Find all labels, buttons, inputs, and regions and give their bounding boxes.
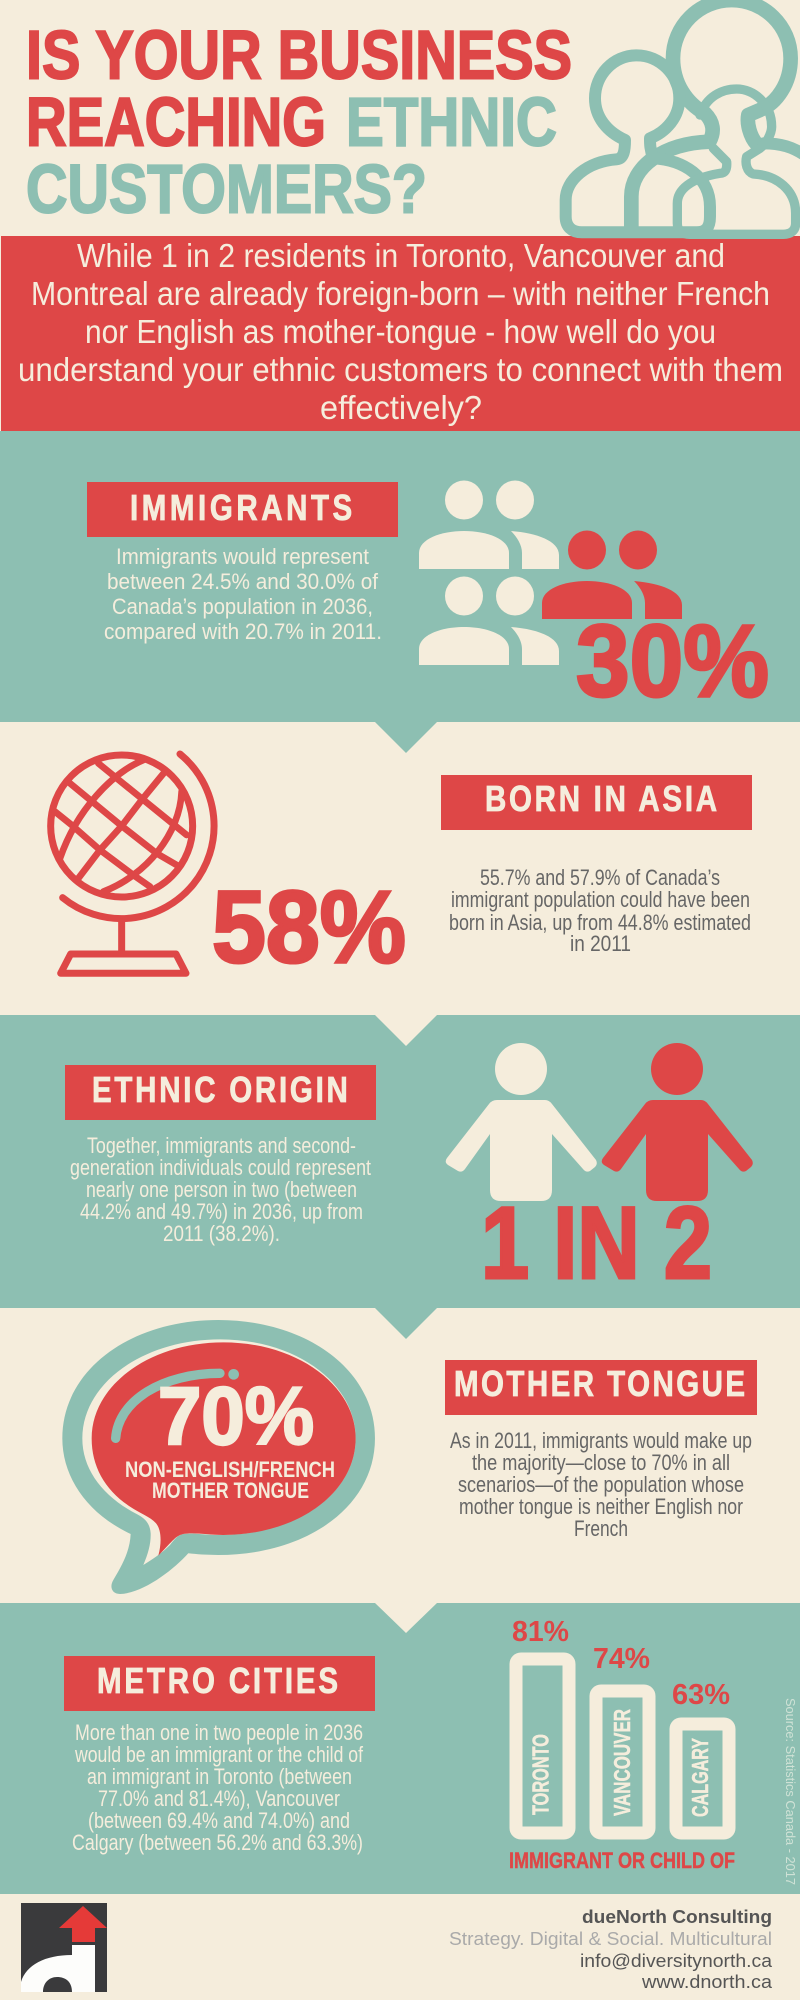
panel: immigrants bbox=[0, 431, 800, 753]
contact details bbox=[449, 1907, 773, 1992]
chart caption: IMMIGRANT OR CHILD OF bbox=[509, 1848, 735, 1873]
text: ethnic origin: 44.2% and 49.7%) in 2036, up from bbox=[80, 1199, 363, 1224]
icon: cream people bottom bbox=[419, 576, 559, 665]
text: immigrants: Immigrants would represent bbox=[116, 544, 369, 569]
text: metro cities: More than one in two people in 2036 bbox=[75, 1720, 363, 1745]
text: ethnic origin: Together, immigrants and second- bbox=[87, 1133, 356, 1158]
intro text bbox=[18, 237, 783, 426]
panel: mother tongue bbox=[0, 1320, 800, 1603]
text: immigrants bbox=[104, 544, 382, 644]
title bbox=[26, 16, 572, 228]
intro text: While 1 in 2 residents in Toronto, Vancouver and bbox=[77, 237, 725, 274]
intro text: nor English as mother-tongue - how well do you bbox=[85, 313, 716, 350]
heading: metro cities bbox=[64, 1656, 375, 1711]
icon: red people bbox=[542, 530, 682, 619]
text: born in asia: in 2011 bbox=[570, 931, 631, 956]
stat: 30%: 30% bbox=[576, 604, 769, 718]
heading: metro cities: METRO CITIES bbox=[97, 1660, 338, 1701]
text: immigrants: compared with 20.7% in 2011. bbox=[104, 619, 382, 644]
bar: calgary bbox=[676, 1724, 729, 1833]
icon: cream person bbox=[446, 1043, 597, 1201]
icon: cream people top bbox=[419, 480, 559, 569]
text: born in asia: 55.7% and 57.9% of Canada’s bbox=[480, 865, 720, 890]
bar: vancouver: VANCOUVER bbox=[609, 1709, 635, 1816]
heading: immigrants: IMMIGRANTS bbox=[130, 487, 352, 528]
heading: mother tongue: MOTHER TONGUE bbox=[454, 1363, 745, 1404]
text: immigrants: between 24.5% and 30.0% of bbox=[107, 569, 379, 594]
bar: vancouver bbox=[596, 1691, 649, 1833]
text: metro cities: 77.0% and 81.4%), Vancouver bbox=[98, 1786, 340, 1811]
heading: immigrants bbox=[87, 482, 398, 537]
text: mother tongue: the majority—close to 70% in all bbox=[472, 1450, 730, 1475]
icon: outlined group of people bbox=[566, 0, 800, 234]
icon: globe bbox=[51, 754, 214, 973]
text: immigrants: Canada’s population in 2036, bbox=[112, 594, 373, 619]
bar chart: metro cities bbox=[509, 1616, 735, 1873]
bar: calgary: CALGARY bbox=[687, 1738, 713, 1817]
intro text: effectively? bbox=[320, 389, 482, 426]
text: metro cities: (between 69.4% and 74.0%) and bbox=[88, 1808, 350, 1833]
heading: born in asia bbox=[441, 775, 752, 830]
text: mother tongue: French bbox=[574, 1516, 628, 1541]
text: ethnic origin: nearly one person in two (between bbox=[86, 1177, 357, 1202]
text: ethnic origin: generation individuals could represent bbox=[70, 1155, 371, 1180]
title: CUSTOMERS? bbox=[26, 150, 427, 228]
title: ETHNIC bbox=[346, 84, 557, 160]
bar: toronto: TORONTO bbox=[528, 1734, 554, 1815]
title: IS YOUR BUSINESS bbox=[26, 16, 572, 94]
value labels: 63% bbox=[672, 1679, 730, 1711]
panel: metro cities bbox=[0, 1603, 800, 1894]
text: mother tongue bbox=[450, 1428, 752, 1541]
panel: intro banner bbox=[1, 236, 800, 431]
contact details: dueNorth Consulting bbox=[582, 1907, 772, 1927]
icon: red person bbox=[602, 1043, 753, 1201]
text: metro cities: an immigrant in Toronto (between bbox=[87, 1764, 352, 1789]
text: ethnic origin: 2011 (38.2%). bbox=[163, 1221, 280, 1246]
value labels: 74% bbox=[593, 1643, 650, 1675]
text: born in asia bbox=[449, 865, 751, 956]
stat: 58%: 58% bbox=[212, 870, 406, 984]
contact details: www.dnorth.ca bbox=[641, 1972, 773, 1992]
title: REACHING bbox=[26, 84, 326, 160]
panel: born in asia bbox=[0, 753, 800, 1015]
heading: ethnic origin: ETHNIC ORIGIN bbox=[92, 1069, 348, 1110]
stat: 1 in 2: 1 IN 2 bbox=[481, 1186, 712, 1300]
heading: mother tongue bbox=[445, 1360, 757, 1415]
heading: born in asia: BORN IN ASIA bbox=[485, 778, 717, 819]
icon: speech bubble bbox=[62, 1320, 375, 1594]
contact details: Strategy. Digital & Social. Multicultural bbox=[449, 1929, 772, 1949]
value labels bbox=[512, 1616, 730, 1711]
contact details: info@diversitynorth.ca bbox=[580, 1951, 773, 1971]
text: ethnic origin bbox=[70, 1133, 371, 1246]
bar: toronto bbox=[516, 1659, 569, 1833]
bubble caption bbox=[125, 1457, 335, 1503]
heading: ethnic origin bbox=[65, 1065, 376, 1120]
text: metro cities: would be an immigrant or the child of bbox=[74, 1742, 364, 1767]
panel: ethnic origin bbox=[0, 1015, 800, 1339]
text: mother tongue: scenarios—of the population whose bbox=[458, 1472, 744, 1497]
value labels: 81% bbox=[512, 1616, 569, 1648]
text: metro cities bbox=[72, 1720, 364, 1855]
bubble caption: NON-ENGLISH/FRENCH bbox=[125, 1457, 335, 1482]
text: metro cities: Calgary (between 56.2% and 63.3%) bbox=[72, 1830, 363, 1855]
panel: footer bbox=[0, 1894, 800, 2000]
stat: 70%: 70% bbox=[158, 1371, 314, 1462]
bubble caption: MOTHER TONGUE bbox=[152, 1478, 309, 1503]
logo bbox=[21, 1903, 107, 1992]
source note: Source: Statistics Canada - 2017 bbox=[783, 1698, 798, 1885]
